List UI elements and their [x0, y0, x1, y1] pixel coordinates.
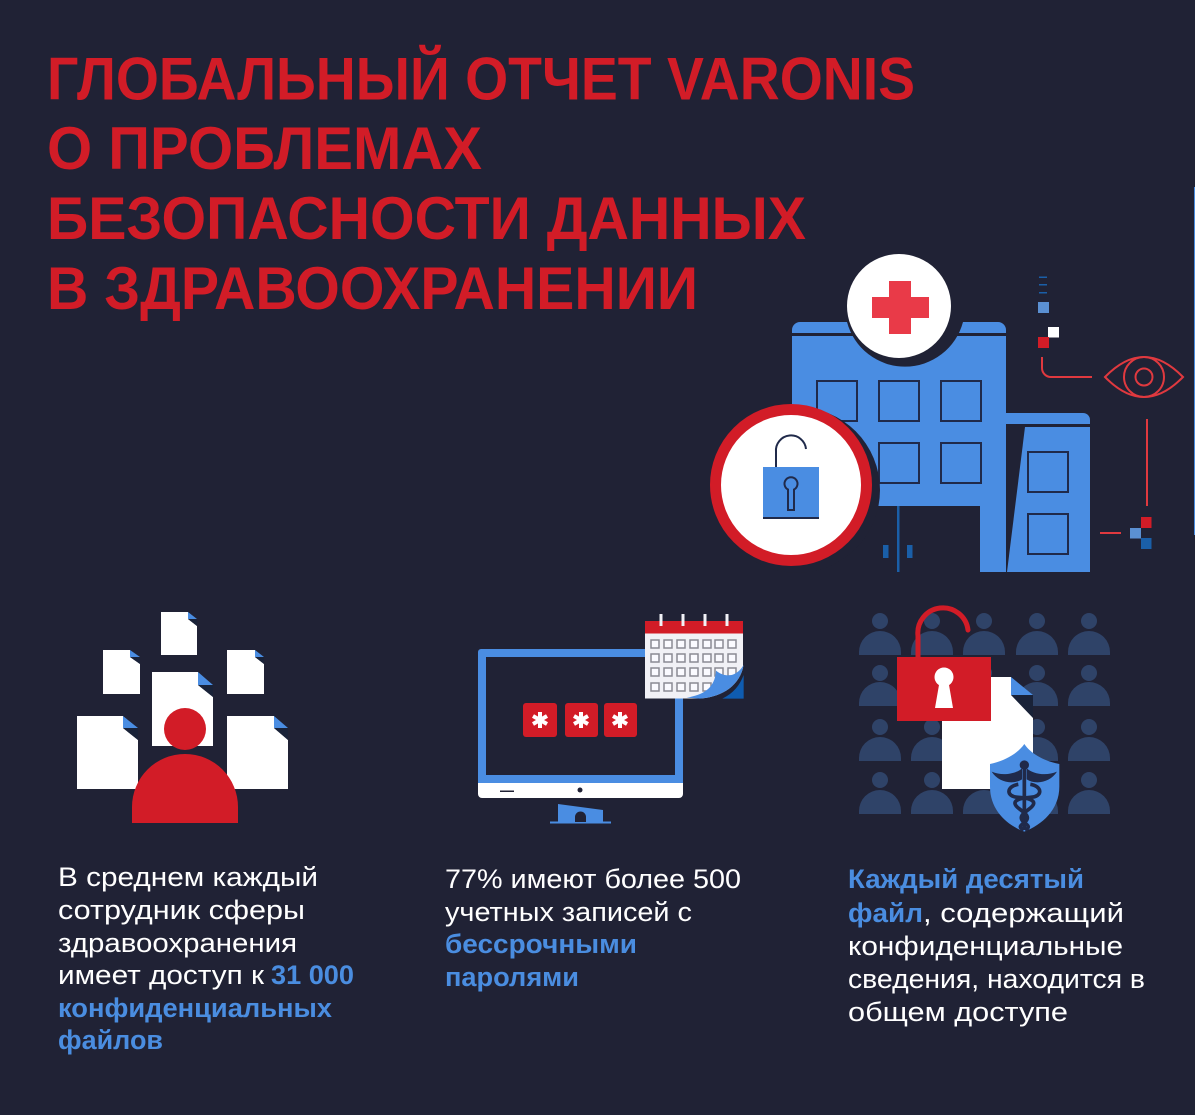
text: passwords: паролями — [445, 962, 579, 992]
title — [47, 46, 915, 322]
main building — [792, 322, 1006, 572]
text: shared files: Каждый десятый — [848, 864, 1084, 894]
password asterisks — [523, 703, 637, 737]
text: file access: здравоохранения — [58, 928, 297, 958]
text: passwords: 77% имеют более 500 — [445, 864, 741, 894]
text: shared files: файл — [848, 898, 923, 928]
text: shared files — [848, 864, 1145, 1027]
icon: eye — [1105, 357, 1183, 397]
icon: crowd of people — [859, 613, 1110, 814]
text: shared files: сведения, находится в — [848, 964, 1145, 994]
title: ГЛОБАЛЬНЫЙ ОТЧЕТ VARONIS — [47, 46, 915, 112]
text: file access: сотрудник сферы — [58, 895, 305, 925]
text: shared files: , содержащий — [923, 898, 1124, 928]
title: БЕЗОПАСНОСТИ ДАННЫХ — [47, 185, 806, 252]
icon: medical cross badge — [847, 254, 963, 367]
icon: calendar — [645, 614, 744, 699]
panel: passwords — [445, 614, 744, 992]
icon: open padlock badge — [714, 407, 880, 573]
icon: monitor with password — [478, 649, 683, 824]
text: shared files: конфиденциальные — [848, 931, 1123, 961]
icon: files and employee — [77, 612, 288, 823]
panel: access to files — [58, 612, 354, 1055]
icon: open red lock — [897, 608, 991, 721]
icon: medical shield — [990, 744, 1059, 832]
illustration: hospital — [714, 254, 1183, 573]
text: file access: В среднем каждый — [58, 862, 318, 892]
text: shared files: общем доступе — [848, 997, 1068, 1027]
title: О ПРОБЛЕМАХ — [47, 115, 482, 182]
side wing — [1006, 413, 1090, 572]
text: file access: имеет доступ к — [58, 960, 264, 990]
text: passwords: учетных записей с — [445, 897, 692, 927]
text: passwords — [445, 864, 741, 992]
text: file access: 31 000 — [271, 960, 354, 990]
icon: document — [942, 677, 1033, 789]
data squares and connectors — [1038, 276, 1152, 549]
title: В ЗДРАВООХРАНЕНИИ — [47, 255, 698, 322]
panel: shared files — [848, 608, 1145, 1027]
text: file access: файлов — [58, 1025, 163, 1055]
door — [883, 506, 912, 572]
text: file access — [58, 862, 354, 1055]
text: passwords: бессрочными — [445, 929, 637, 959]
text: file access: конфиденциальных — [58, 993, 332, 1023]
